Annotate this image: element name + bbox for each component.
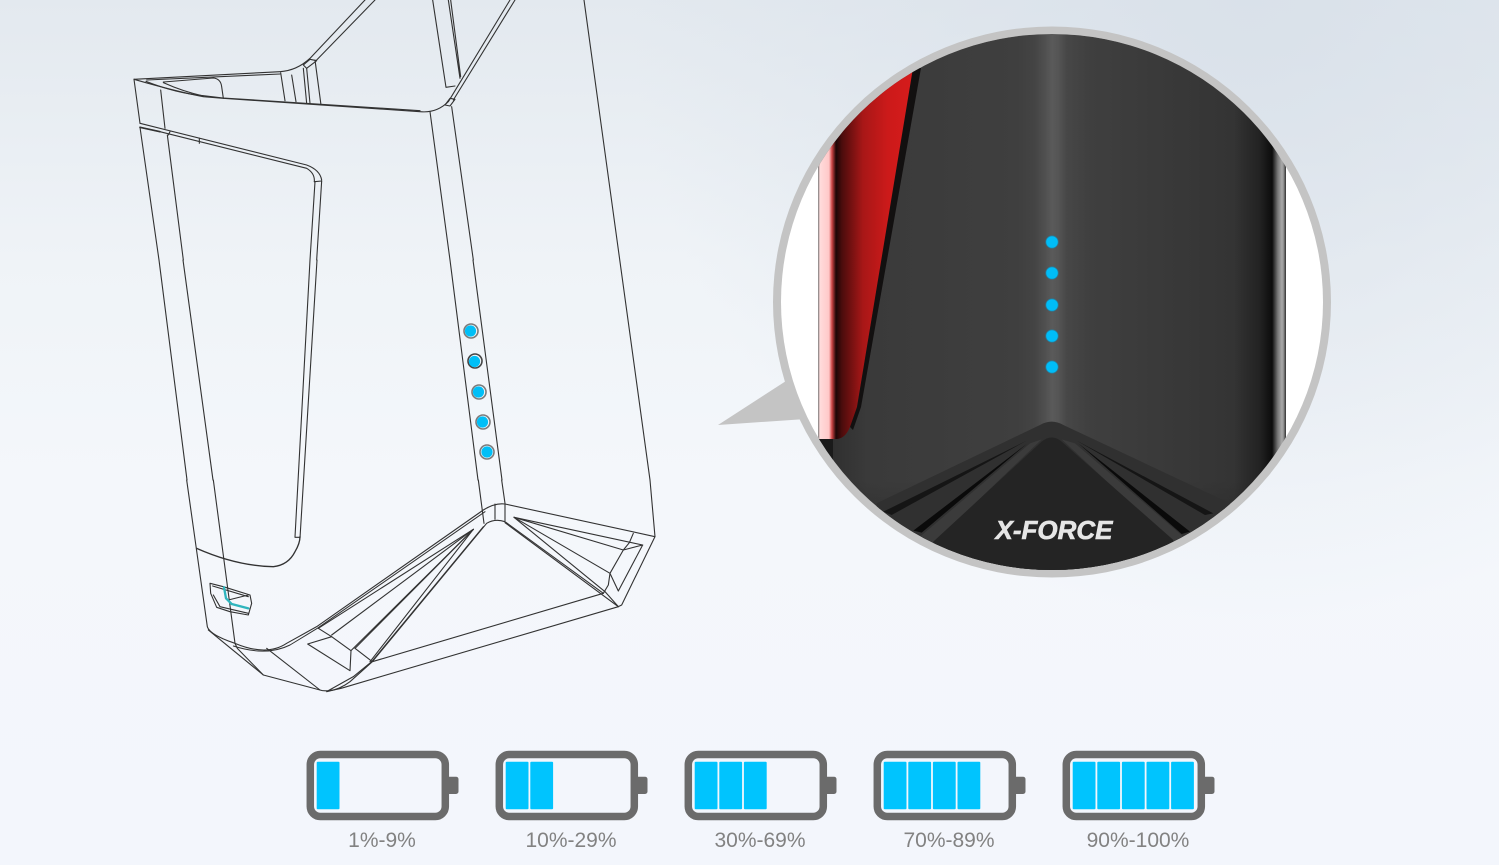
battery 30%-69% xyxy=(688,754,836,852)
lens content xyxy=(818,34,1286,570)
red side panel xyxy=(818,72,913,439)
device top outline xyxy=(134,0,515,260)
battery 70%-89%: 70%-89% xyxy=(903,829,995,852)
base chevron xyxy=(877,422,1230,587)
battery 1%-9%: 1%-9% xyxy=(348,829,416,852)
battery 70%-89% xyxy=(877,754,1026,852)
right rear edge of device xyxy=(584,0,650,480)
battery 90%-100%: 90%-100% xyxy=(1087,829,1189,852)
battery 10%-29%: 10%-29% xyxy=(525,829,617,852)
X-FORCE logo: X-FORCE xyxy=(993,517,1114,545)
battery 1%-9% xyxy=(310,754,458,852)
lens LEDs xyxy=(1046,236,1058,373)
magnifier callout pointer xyxy=(718,381,806,425)
battery legend xyxy=(310,754,1214,852)
magnifier lens xyxy=(773,0,1331,600)
battery 90%-100% xyxy=(1066,754,1214,852)
device mid edges xyxy=(159,260,502,538)
device indicator LEDs xyxy=(464,324,494,459)
device base outline xyxy=(187,480,655,692)
battery 10%-29% xyxy=(499,754,648,852)
panel shadow edge xyxy=(850,68,921,430)
lower left dark edge xyxy=(819,439,833,460)
device wireframe illustration xyxy=(134,0,655,692)
device body close-up xyxy=(819,34,1286,570)
lens ring xyxy=(773,26,1331,578)
battery 30%-69%: 30%-69% xyxy=(714,829,806,852)
icon: charging port xyxy=(210,583,252,615)
